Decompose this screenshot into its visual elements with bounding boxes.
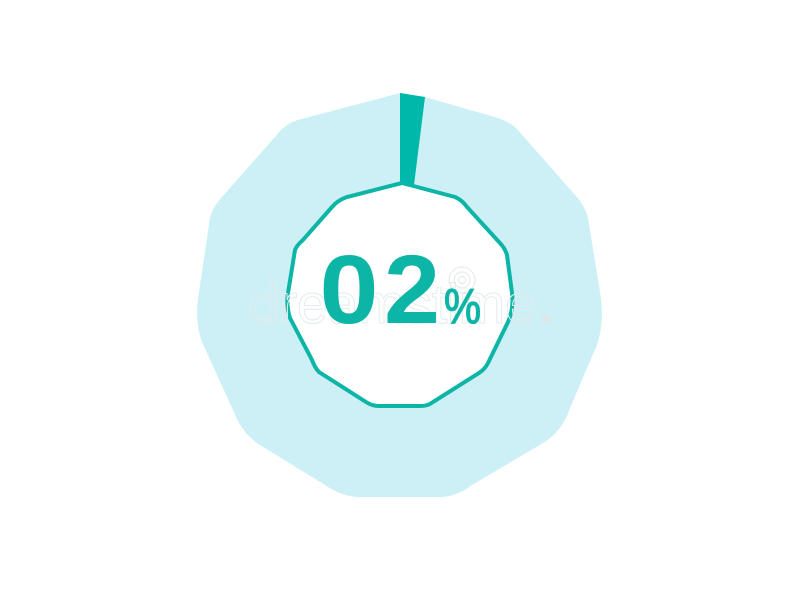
percent sign: % [444, 280, 481, 334]
percentage value [320, 235, 481, 344]
watermark text: dreamstime [248, 272, 536, 335]
outer light blue decagon ring [197, 93, 602, 497]
inner white decagon with teal outline [287, 183, 512, 406]
digit 2: 2 [384, 235, 440, 344]
watermark swirl logo [449, 267, 475, 293]
digit 0: 0 [320, 235, 378, 344]
watermark registered mark [542, 314, 550, 324]
watermark [248, 267, 550, 335]
progress wedge: 2 percent [400, 93, 425, 185]
